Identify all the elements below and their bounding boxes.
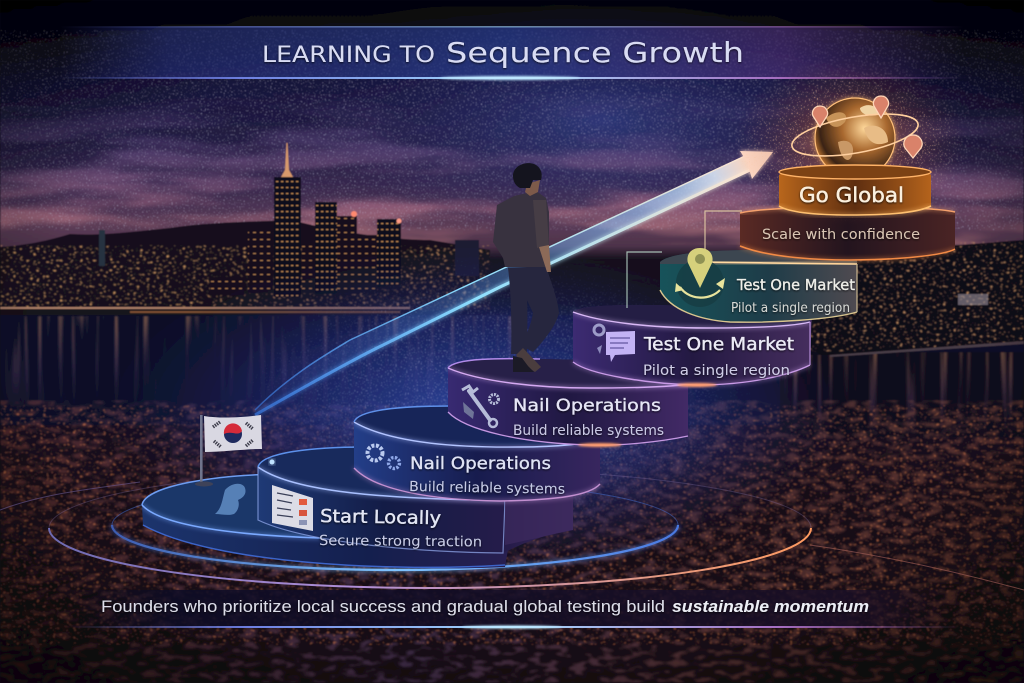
label: Start Locally: Secure strong traction bbox=[319, 533, 482, 550]
ground lights bbox=[0, 400, 1024, 683]
title text: LEARNING TO bbox=[262, 43, 435, 68]
neck and face bbox=[525, 180, 540, 196]
step 7: Go Global bbox=[779, 165, 931, 215]
label: Test One Market, teal step bbox=[731, 276, 855, 316]
title band bbox=[60, 26, 964, 80]
pins bbox=[812, 96, 922, 158]
label: Test One Market, purple step: Test One Market bbox=[643, 334, 794, 355]
shoreline bbox=[0, 307, 410, 309]
city right bbox=[790, 240, 1024, 355]
step 3: Nail Operations (purple) bbox=[448, 359, 688, 447]
label: Nail Operations, blue step: Build reliable systems bbox=[409, 479, 565, 498]
jacket bbox=[493, 191, 549, 267]
footer band bbox=[70, 590, 960, 629]
growth arrow bbox=[255, 151, 773, 415]
label: Start Locally: Start Locally bbox=[320, 506, 442, 529]
hair bbox=[513, 163, 542, 188]
orbit rings around the staircase base bbox=[0, 468, 1024, 590]
icon: document checklist bbox=[272, 485, 313, 531]
icon: wrench and gear bbox=[462, 386, 498, 427]
icon: map pin with arrows bbox=[675, 248, 725, 307]
central blue glow bbox=[110, 245, 850, 575]
label: Nail Operations, purple step bbox=[513, 396, 664, 439]
step 1: Start Locally bbox=[258, 447, 573, 553]
city lights left bbox=[0, 245, 490, 310]
icon: South Korea flag bbox=[195, 415, 262, 486]
far water with reflections bbox=[0, 315, 1024, 437]
step 4: Test One Market (purple) bbox=[573, 305, 812, 387]
step 5: Test One Market (teal) bbox=[660, 248, 857, 322]
icon: globe with orbit and pins bbox=[789, 96, 922, 178]
label: Test One Market, teal step: Pilot a single region bbox=[731, 300, 850, 316]
label: Test One Market, purple step: Pilot a single region bbox=[643, 363, 790, 379]
footer text bbox=[101, 597, 869, 616]
title text: Sequence Growth bbox=[446, 36, 744, 69]
label: Scale with confidence: Scale with confidence bbox=[762, 227, 920, 243]
icon: chat bubble and pin bbox=[594, 325, 635, 362]
label: Test One Market, teal step: Test One Market bbox=[736, 276, 855, 294]
shoes bbox=[516, 348, 541, 372]
connector lines between upper steps bbox=[627, 211, 742, 308]
footer text: Founders who prioritize local success and gradual global testing build bbox=[101, 597, 665, 616]
step base: Korea disc bbox=[142, 474, 520, 568]
label: Test One Market, purple step bbox=[643, 334, 794, 379]
label: Go Global: Go Global bbox=[799, 183, 904, 207]
skyscrapers bbox=[99, 143, 479, 297]
label: Nail Operations, blue step: Nail Operations bbox=[410, 454, 551, 474]
hills silhouette bbox=[0, 220, 490, 310]
globe particle glow bbox=[736, 68, 964, 220]
title text bbox=[262, 36, 744, 69]
person walking up the steps bbox=[493, 163, 559, 372]
footer text: sustainable momentum bbox=[672, 597, 869, 616]
icon: Korea map bbox=[215, 484, 246, 515]
legs bbox=[508, 266, 559, 354]
label: Nail Operations, blue step bbox=[409, 454, 565, 498]
label: Nail Operations, purple step: Nail Operations bbox=[513, 396, 661, 416]
step 2: Nail Operations (blue) bbox=[354, 406, 600, 501]
step 6: Scale with confidence bbox=[740, 207, 955, 260]
label: Nail Operations, purple step: Build reliable systems bbox=[513, 423, 664, 439]
label: Start Locally bbox=[319, 506, 482, 550]
hand bbox=[539, 245, 551, 272]
icon: gears bbox=[368, 446, 400, 468]
